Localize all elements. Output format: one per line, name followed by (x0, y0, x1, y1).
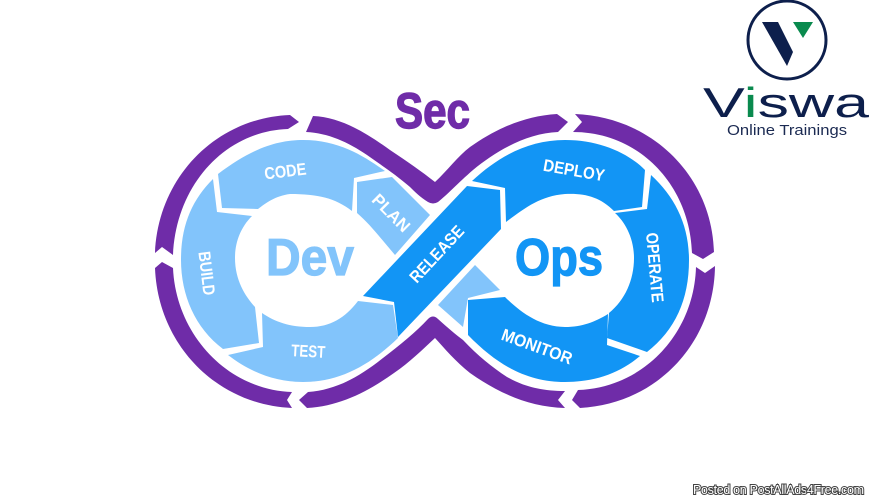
ring segment: top middle (306, 114, 568, 204)
segment labels (194, 156, 667, 368)
segment: deploy (472, 140, 645, 222)
segment: build (181, 179, 259, 349)
segment: plan (357, 177, 430, 255)
Dev loop (181, 140, 430, 382)
watermark: Posted on PostAllAds4Free.com (693, 483, 864, 497)
label: deploy: DEPLOY (542, 156, 607, 185)
logo green triangle (793, 22, 813, 38)
logo: Viswa Online Trainings (703, 1, 870, 139)
ring segment: lower right (572, 266, 715, 408)
ring segment: upper left (155, 115, 299, 255)
segment: code (218, 140, 385, 211)
label: plan: PLAN (368, 190, 414, 236)
logo tagline: Online Trainings (727, 123, 847, 139)
label: test: TEST (291, 341, 326, 362)
ring segment: bottom middle (299, 316, 565, 408)
purple security ring (155, 114, 715, 408)
label: build: BUILD (194, 250, 219, 296)
centre label: Ops: Ops (515, 229, 603, 287)
logo V mark (762, 22, 793, 66)
Ops loop (363, 140, 689, 382)
title: Sec: Sec (395, 83, 470, 139)
ring segment: lower left (155, 262, 292, 408)
label: release: RELEASE (406, 222, 468, 287)
label: monitor: MONITOR (499, 325, 575, 368)
ring segment: upper right (573, 114, 714, 259)
segment: small light blue plan arrow tail (438, 265, 500, 327)
logo circle (748, 1, 826, 79)
label: operate: OPERATE (642, 232, 667, 303)
label: code: CODE (263, 160, 307, 184)
centre label: Dev: Dev (266, 229, 354, 287)
segment: operate (607, 175, 689, 352)
segment: release arrow (363, 186, 501, 337)
segment: monitor (468, 297, 640, 382)
logo wordmark: V iswa (703, 79, 870, 126)
segment: test (228, 301, 398, 382)
